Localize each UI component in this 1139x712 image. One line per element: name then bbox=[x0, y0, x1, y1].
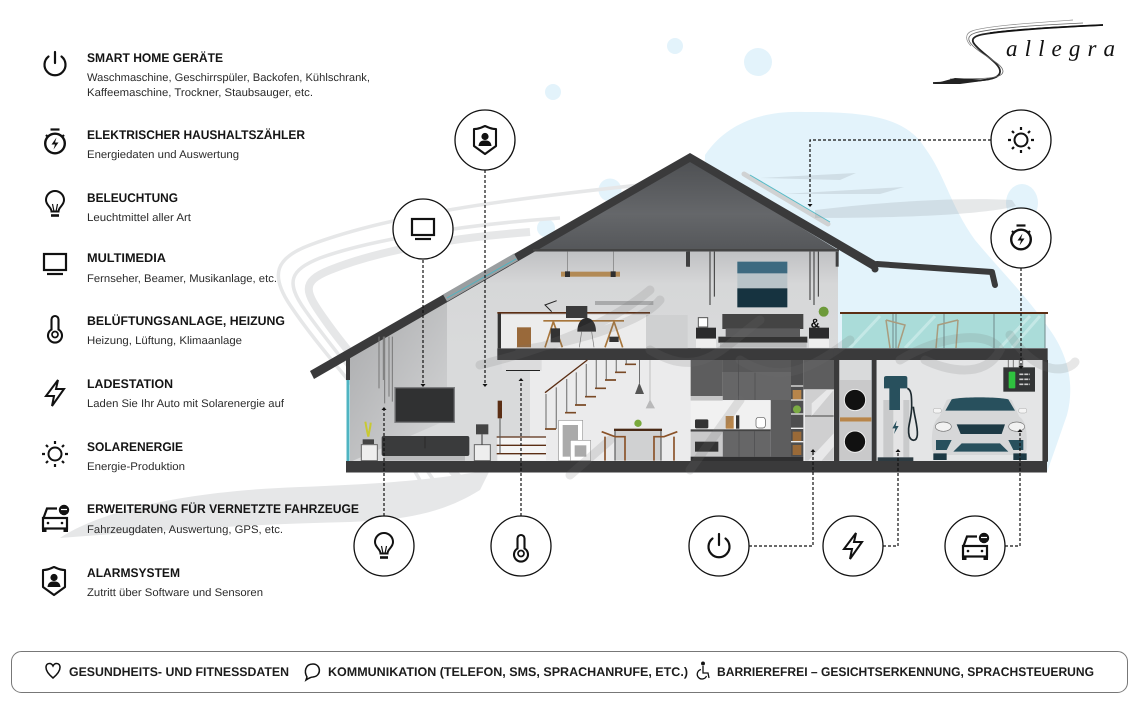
list item: lighting: BELEUCHTUNG bbox=[87, 191, 178, 205]
picture frames bbox=[559, 420, 591, 461]
text: health: GESUNDHEITS- UND FITNESSDATEN bbox=[69, 665, 289, 679]
list item: charging: LADESTATION bbox=[87, 377, 173, 391]
list item: ventilation bbox=[48, 314, 285, 347]
list item: smart home bbox=[44, 51, 370, 99]
wall post bbox=[687, 252, 690, 267]
icon: heart bbox=[46, 663, 60, 678]
television bbox=[395, 388, 454, 422]
house interior walls bbox=[350, 250, 840, 462]
list item: lighting: Leuchtmittel aller Art bbox=[87, 212, 191, 224]
car bbox=[932, 397, 1027, 460]
list item: lighting bbox=[46, 191, 191, 224]
text: communication: KOMMUNIKATION (TELEFON, SMS, SPRACHANRUFE, ETC.) bbox=[328, 665, 688, 679]
roof outline bbox=[310, 153, 995, 379]
side table and lamp bbox=[474, 424, 490, 461]
cabinet under stairs bbox=[497, 401, 546, 461]
list item: alarm: ALARMSYSTEM bbox=[87, 566, 180, 580]
list item: solar: Energie-Produktion bbox=[87, 461, 185, 473]
list item: multimedia bbox=[44, 251, 277, 285]
circle icon: charging bbox=[823, 516, 883, 576]
solar panel bbox=[744, 174, 830, 224]
circle icon: vehicle bbox=[945, 516, 1005, 576]
house illustration bbox=[310, 153, 1075, 475]
air conditioner bbox=[502, 360, 542, 371]
staircase bbox=[545, 360, 636, 429]
circle icon: light bbox=[354, 516, 414, 576]
circle icon: solar bbox=[991, 110, 1051, 170]
circle icon: heating bbox=[491, 516, 551, 576]
list item: meter bbox=[45, 128, 305, 161]
background blue blob bbox=[537, 38, 1070, 472]
study loft bbox=[497, 301, 688, 348]
circle icon: alarm bbox=[455, 110, 515, 170]
streaks on blue bbox=[760, 173, 1016, 218]
list item: vehicle: ERWEITERUNG FÜR VERNETZTE FAHRZEUGE bbox=[87, 502, 359, 516]
allegra watermark overlay bbox=[480, 290, 1075, 475]
list item: smart home: Kaffeemaschine, Trockner, Staubsauger, etc. bbox=[87, 87, 313, 99]
battery panel bbox=[1003, 360, 1035, 392]
washer and dryer bbox=[840, 360, 871, 461]
list item: alarm: Zutritt über Software und Sensoren bbox=[87, 587, 263, 599]
list item: ventilation: BELÜFTUNGSANLAGE, HEIZUNG bbox=[87, 314, 285, 328]
circle icon: multimedia bbox=[393, 199, 453, 259]
dining table bbox=[602, 420, 677, 461]
bedroom bbox=[686, 252, 839, 348]
list item: charging: Laden Sie Ihr Auto mit Solarenergie auf bbox=[87, 398, 285, 410]
icon: wheelchair bbox=[697, 662, 709, 679]
circle icon: meter bbox=[991, 208, 1051, 268]
fridge bbox=[805, 390, 834, 461]
balcony bbox=[840, 312, 1048, 348]
circle icon: appliances bbox=[689, 516, 749, 576]
list item: smart home: SMART HOME GERÄTE bbox=[87, 51, 223, 65]
logo bbox=[933, 20, 1115, 84]
kitchen bbox=[691, 360, 834, 461]
list item: vehicle bbox=[42, 502, 359, 536]
outer structure bbox=[834, 348, 1048, 462]
loft slab bbox=[497, 348, 701, 360]
right side rooms bbox=[647, 252, 1048, 462]
list item: charging bbox=[46, 377, 285, 410]
icon: speech bubble bbox=[305, 664, 319, 680]
list item: solar bbox=[42, 440, 185, 473]
watermark swoosh bbox=[60, 185, 640, 538]
list item: smart home: Waschmaschine, Geschirrspüler, Backofen, Kühlschrank, bbox=[87, 72, 370, 84]
bedroom: & bbox=[811, 316, 820, 330]
main floor slab bbox=[647, 348, 1048, 360]
charging station bbox=[878, 376, 917, 461]
list item: multimedia: Fernseher, Beamer, Musikanlage, etc. bbox=[87, 273, 277, 285]
pendant lamps bbox=[635, 360, 655, 408]
list item: vehicle: Fahrzeugdaten, Auswertung, GPS, etc. bbox=[87, 524, 283, 536]
text: accessibility: BARRIEREFREI – GESICHTSERKENNUNG, SPRACHSTEUERUNG bbox=[717, 665, 1094, 679]
garage background bbox=[877, 360, 1042, 461]
hanging wood lamp bbox=[561, 252, 620, 277]
attic bbox=[533, 160, 838, 250]
sofa bbox=[382, 436, 469, 461]
list item: multimedia: MULTIMEDIA bbox=[87, 251, 166, 265]
left wall and floor bbox=[346, 358, 1047, 472]
logo: allegra bbox=[1006, 36, 1115, 61]
list item: alarm bbox=[43, 566, 263, 599]
left room furniture bbox=[361, 252, 701, 461]
list item: meter: Energiedaten und Auswertung bbox=[87, 149, 239, 161]
hanging lamps bbox=[379, 337, 392, 403]
list item: meter: ELEKTRISCHER HAUSHALTSZÄHLER bbox=[87, 128, 305, 142]
connectors bbox=[382, 140, 1024, 546]
bottom bar bbox=[12, 652, 1128, 692]
list item: ventilation: Heizung, Lüftung, Klimaanlage bbox=[87, 335, 242, 347]
list item: solar: SOLARENERGIE bbox=[87, 440, 183, 454]
side table and plant bbox=[361, 422, 377, 461]
